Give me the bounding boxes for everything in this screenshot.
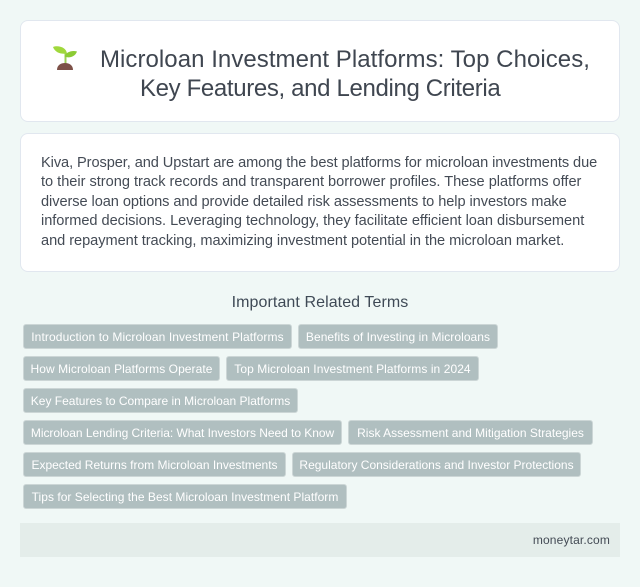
tag: Top Microloan Investment Platforms in 2024 — [234, 362, 471, 376]
tag — [23, 452, 286, 477]
tag — [23, 484, 347, 509]
tag — [292, 452, 581, 477]
title text: Microloan Investment Platforms: Top Choices, — [100, 46, 590, 73]
intro paragraph card — [20, 133, 620, 272]
tag: Key Features to Compare in Microloan Platforms — [31, 394, 290, 408]
tag — [226, 356, 479, 381]
title card — [20, 20, 620, 122]
tag: Tips for Selecting the Best Microloan Investment Platform — [32, 490, 338, 504]
paragraph text: informed decisions. Leveraging technology, they facilitate efficient loan disbursement — [41, 213, 584, 229]
tag: Expected Returns from Microloan Investments — [31, 458, 278, 472]
heading: important related terms: Important Related Terms — [232, 294, 408, 311]
title text — [100, 46, 590, 102]
tag: Regulatory Considerations and Investor Protections — [299, 458, 574, 472]
paragraph text: and repayment tracking, maximizing investment potential in the microloan market. — [41, 233, 564, 249]
tag — [23, 356, 220, 381]
tag: Introduction to Microloan Investment Platforms — [31, 330, 284, 344]
tag — [298, 324, 498, 349]
title text: Key Features, and Lending Criteria — [140, 75, 500, 102]
tag: Risk Assessment and Mitigation Strategies — [357, 426, 584, 440]
paragraph text: diverse loan options and provide detailed risk assessments to help investors make — [41, 194, 567, 210]
tag list — [23, 324, 593, 509]
footer source text: moneytar.com — [533, 533, 610, 547]
tag: How Microloan Platforms Operate — [31, 362, 212, 376]
paragraph text: to their strong track records and transparent borrower profiles. These platforms offer — [41, 174, 581, 190]
tag — [23, 388, 298, 413]
paragraph text: Kiva, Prosper, and Upstart are among the best platforms for microloan investments due — [41, 155, 597, 171]
tag: Microloan Lending Criteria: What Investors Need to Know — [31, 426, 334, 440]
tag — [23, 420, 342, 445]
tag — [23, 324, 292, 349]
tag: Benefits of Investing in Microloans — [306, 330, 490, 344]
icon: seedling — [53, 46, 77, 70]
footer bar — [20, 523, 620, 557]
paragraph text — [41, 155, 597, 249]
tag — [348, 420, 593, 445]
